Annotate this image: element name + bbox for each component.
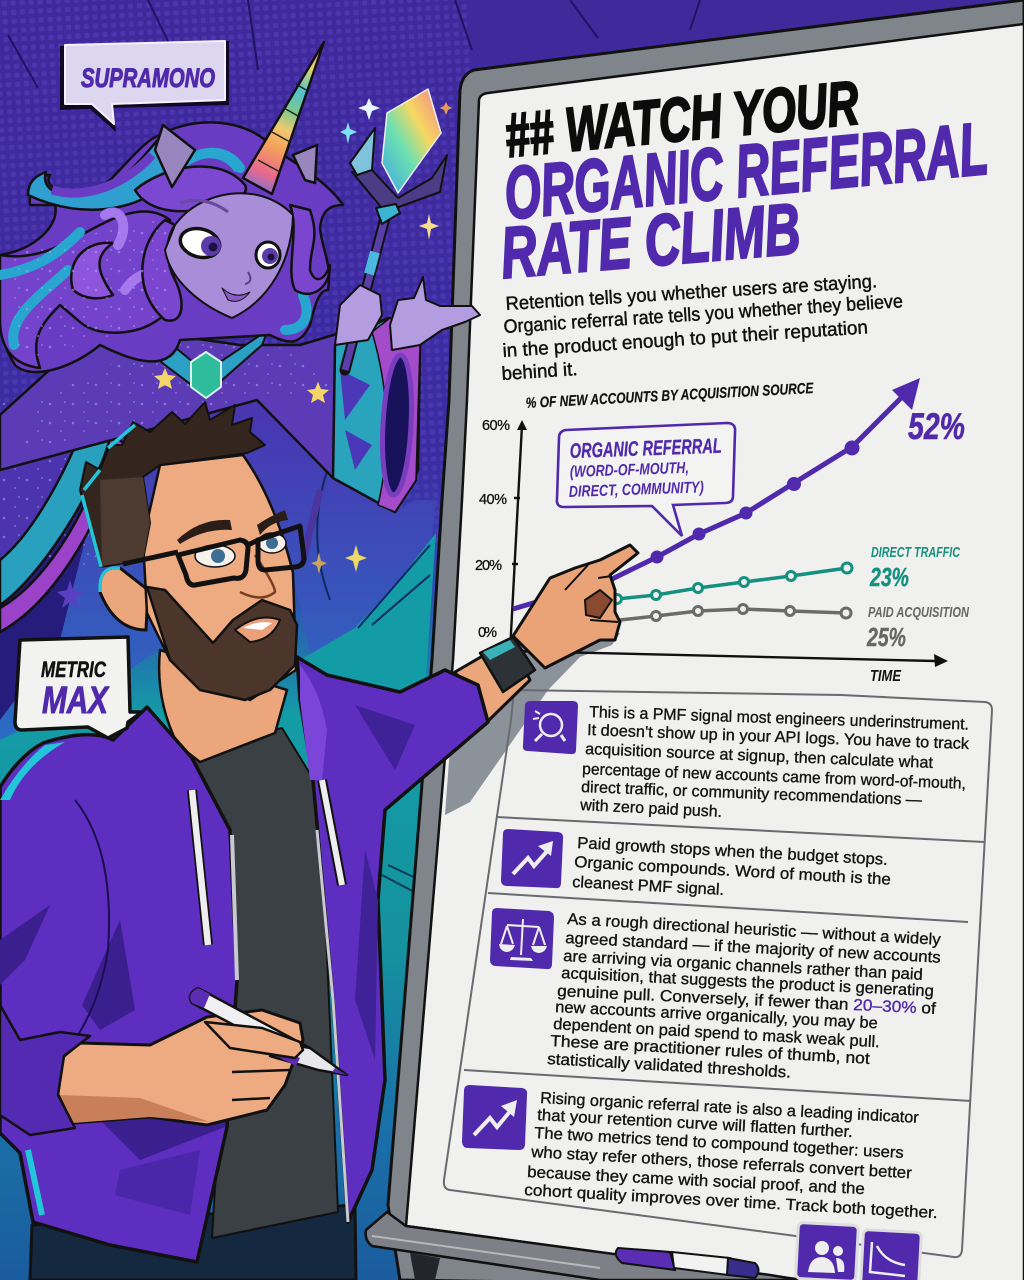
text block [572,835,891,899]
title [498,69,991,294]
icon: users [796,1222,858,1280]
glasses [123,526,304,585]
value label: paid acquisition 25%: PAID ACQUISITION [868,604,970,621]
text block: It doesn't show up in your API logs. You have to track [587,722,970,753]
text block: Paid growth stops when the budget stops. [577,835,888,869]
text block: that your retention curve will flatten further. [537,1107,853,1141]
whiteboard [388,0,1024,1280]
panel 2: paid growth [501,829,891,899]
index finger over marker [205,1022,303,1058]
axis labels: 60% [482,418,510,434]
value label: 52%: 52% [908,406,965,447]
robe speckles [20,335,340,450]
title: RATE CLIMB [498,189,803,294]
holding hand [57,1010,303,1125]
series: organic referral [513,378,920,609]
axis labels [475,418,510,641]
forearm [455,640,530,722]
ear rim [100,568,120,592]
sparkles [340,98,452,240]
pants [30,1205,356,1280]
value label: direct traffic 23% [869,544,961,592]
speech bubble: Metric Max [15,637,142,738]
text block: are arriving via organic channels rather than paid [563,948,923,984]
value label: paid acquisition 25%: 25% [866,622,906,652]
axis labels: 40% [479,492,507,508]
whiteboard surface [406,24,1024,1280]
value label: direct traffic 23%: 23% [869,562,909,592]
robe [0,318,420,512]
speech bubble: Metric Max: METRIC [41,657,107,682]
face [165,193,293,318]
callout: organic referral: ORGANIC REFERRAL [569,435,722,463]
character: Supramono the unicorn wizard [0,41,480,740]
value label: direct traffic 23%: DIRECT TRAFFIC [871,544,961,561]
eyes [195,545,235,567]
character: Metric Max presenter [0,402,638,1280]
text block: The two metrics tend to compound together: users [534,1125,904,1162]
axis labels: 20% [475,558,502,574]
face skin [143,455,296,700]
intro text: in the product enough to put their reputation [502,317,869,362]
axes [510,420,948,667]
axis labels: 0% [478,625,497,641]
series: direct traffic [590,563,852,604]
hoodie drawstring [192,790,208,945]
text block: cohort quality improves over time. Track both together. [524,1182,938,1222]
marker on tray [616,1248,758,1278]
panel 4: leading indicator [462,1085,938,1222]
finger creases [232,1070,290,1100]
cloak drape [0,390,436,740]
text block: Rising organic referral rate is also a leading indicator [540,1090,920,1127]
series: paid acquisition [590,604,851,629]
sleeve cuff [0,1005,90,1135]
icon: scales [490,908,554,969]
text block: cleanest PMF signal. [572,874,724,899]
panel 1: PMF signal [523,701,970,821]
panel 3: directional heuristic [490,908,941,1082]
intro text: Retention tells you whether users are staying. [505,271,878,315]
eyebrows [177,510,288,544]
ears [155,125,317,187]
pendant [191,352,221,398]
nose [240,555,275,598]
icon: retention curve [861,1230,921,1280]
hair speckles [5,215,170,360]
whiteboard frame [388,0,1024,1280]
text block: These are practitioner rules of thumb, not [550,1033,871,1068]
hand shadow on board [445,633,620,815]
hair [0,122,343,372]
text block [579,704,970,821]
icon: trend arrow [501,829,563,888]
sleeve band [333,318,420,512]
intro text [501,271,903,385]
stars on swirl [311,545,367,574]
crystal [382,89,441,193]
speech bubble: Supramono: SUPRAMONO [81,63,215,93]
ear [100,568,148,630]
text block [547,911,941,1082]
callout: organic referral [557,423,735,536]
icon: trend arrow [462,1085,527,1150]
rainbow horn [243,42,324,194]
text block: percentage of new accounts came from word-of-mouth, [582,761,966,793]
text block: Organic compounds. Word of mouth is the [574,854,891,889]
text block: direct traffic, or community recommendations — [581,779,922,809]
text block: genuine pull. Conversely, if fewer than 20–30% of [557,983,937,1018]
panel outline with dividers [444,690,992,1257]
value label: paid acquisition 25% [866,604,970,652]
hood collar [90,310,268,395]
pointing hand [513,545,638,668]
text block: acquisition source at signup, then calculate what [585,741,934,772]
watch [480,637,535,692]
beard [147,587,297,700]
title: ## WATCH YOUR [502,69,862,171]
intro text: Organic referral rate tells you whether they believe [503,291,903,338]
speech bubble: Metric Max: MAX [42,680,110,722]
text block: dependent on paid spend to mask weak pull. [553,1016,880,1051]
callout: organic referral: (WORD-OF-MOUTH, [570,460,689,481]
text block: statistically validated thresholds. [547,1051,791,1082]
robe details [154,368,329,403]
line chart: TIME [870,668,902,685]
text block: who stay refer others, those referrals convert better [530,1144,913,1182]
presenting hand [390,277,480,350]
t-shirt [185,728,338,1238]
text block: because they came with social proof, and the [527,1164,865,1198]
text block: with zero paid push. [579,797,722,821]
text block: As a rough directional heuristic — without a widely [567,911,941,949]
staff [303,128,447,560]
hand shading [60,1095,210,1123]
intro text: behind it. [501,359,578,385]
hoodie right and sleeve [297,657,488,1222]
text block: new accounts arrive organically, you may be [555,999,878,1032]
speech bubble: Supramono [60,41,229,132]
hair [80,402,265,567]
chart title: % OF NEW ACCOUNTS BY ACQUISITION SOURCE [525,380,815,412]
whiteboard tray [366,1212,921,1280]
hand on staff [335,285,382,345]
text block [524,1090,938,1222]
text block: acquisition, that suggests the product is generating [561,965,934,1000]
line chart [475,378,970,685]
mouth [235,618,280,642]
marker in hand [190,988,347,1075]
text block: agreed standard — if the majority of new accounts [565,930,941,967]
head [80,402,304,700]
callout: organic referral: DIRECT, COMMUNITY) [569,479,704,501]
neck [159,650,287,762]
icon: magnifier [523,701,578,754]
text block: This is a PMF signal most engineers underinstrument. [589,704,969,734]
hoodie left [0,707,237,1262]
